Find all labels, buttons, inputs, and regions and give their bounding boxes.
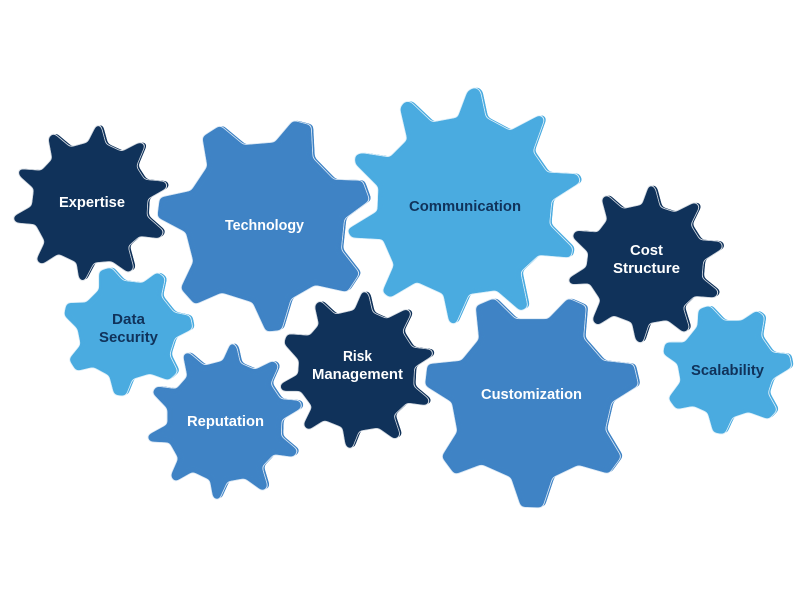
label: Risk Management: Risk (343, 349, 373, 365)
gear: Communication (348, 88, 582, 323)
label: Customization: Customization (481, 387, 582, 403)
label: Cost Structure: Cost (630, 243, 663, 259)
gear: Customization (426, 299, 640, 507)
gear: Data Security (65, 268, 194, 395)
label: Cost Structure (613, 243, 680, 277)
label: Expertise: Expertise (59, 195, 125, 211)
gear: Scalability (664, 306, 793, 433)
gear: Reputation (148, 343, 303, 499)
label: Reputation: Reputation (187, 414, 264, 430)
label: Cost Structure: Structure (613, 261, 680, 277)
label: Technology: Technology (225, 218, 304, 234)
gear: Cost Structure (569, 185, 724, 343)
label: Data Security (99, 312, 158, 346)
gear: Technology (158, 121, 371, 331)
gear: Risk Management (281, 291, 434, 448)
label: Data Security: Data (112, 312, 146, 328)
gear: Expertise (14, 125, 168, 281)
label: Data Security: Security (99, 330, 158, 346)
label: Scalability: Scalability (691, 363, 764, 379)
label: Risk Management: Management (312, 367, 403, 383)
label: Risk Management (312, 349, 403, 383)
label: Communication: Communication (409, 199, 521, 215)
